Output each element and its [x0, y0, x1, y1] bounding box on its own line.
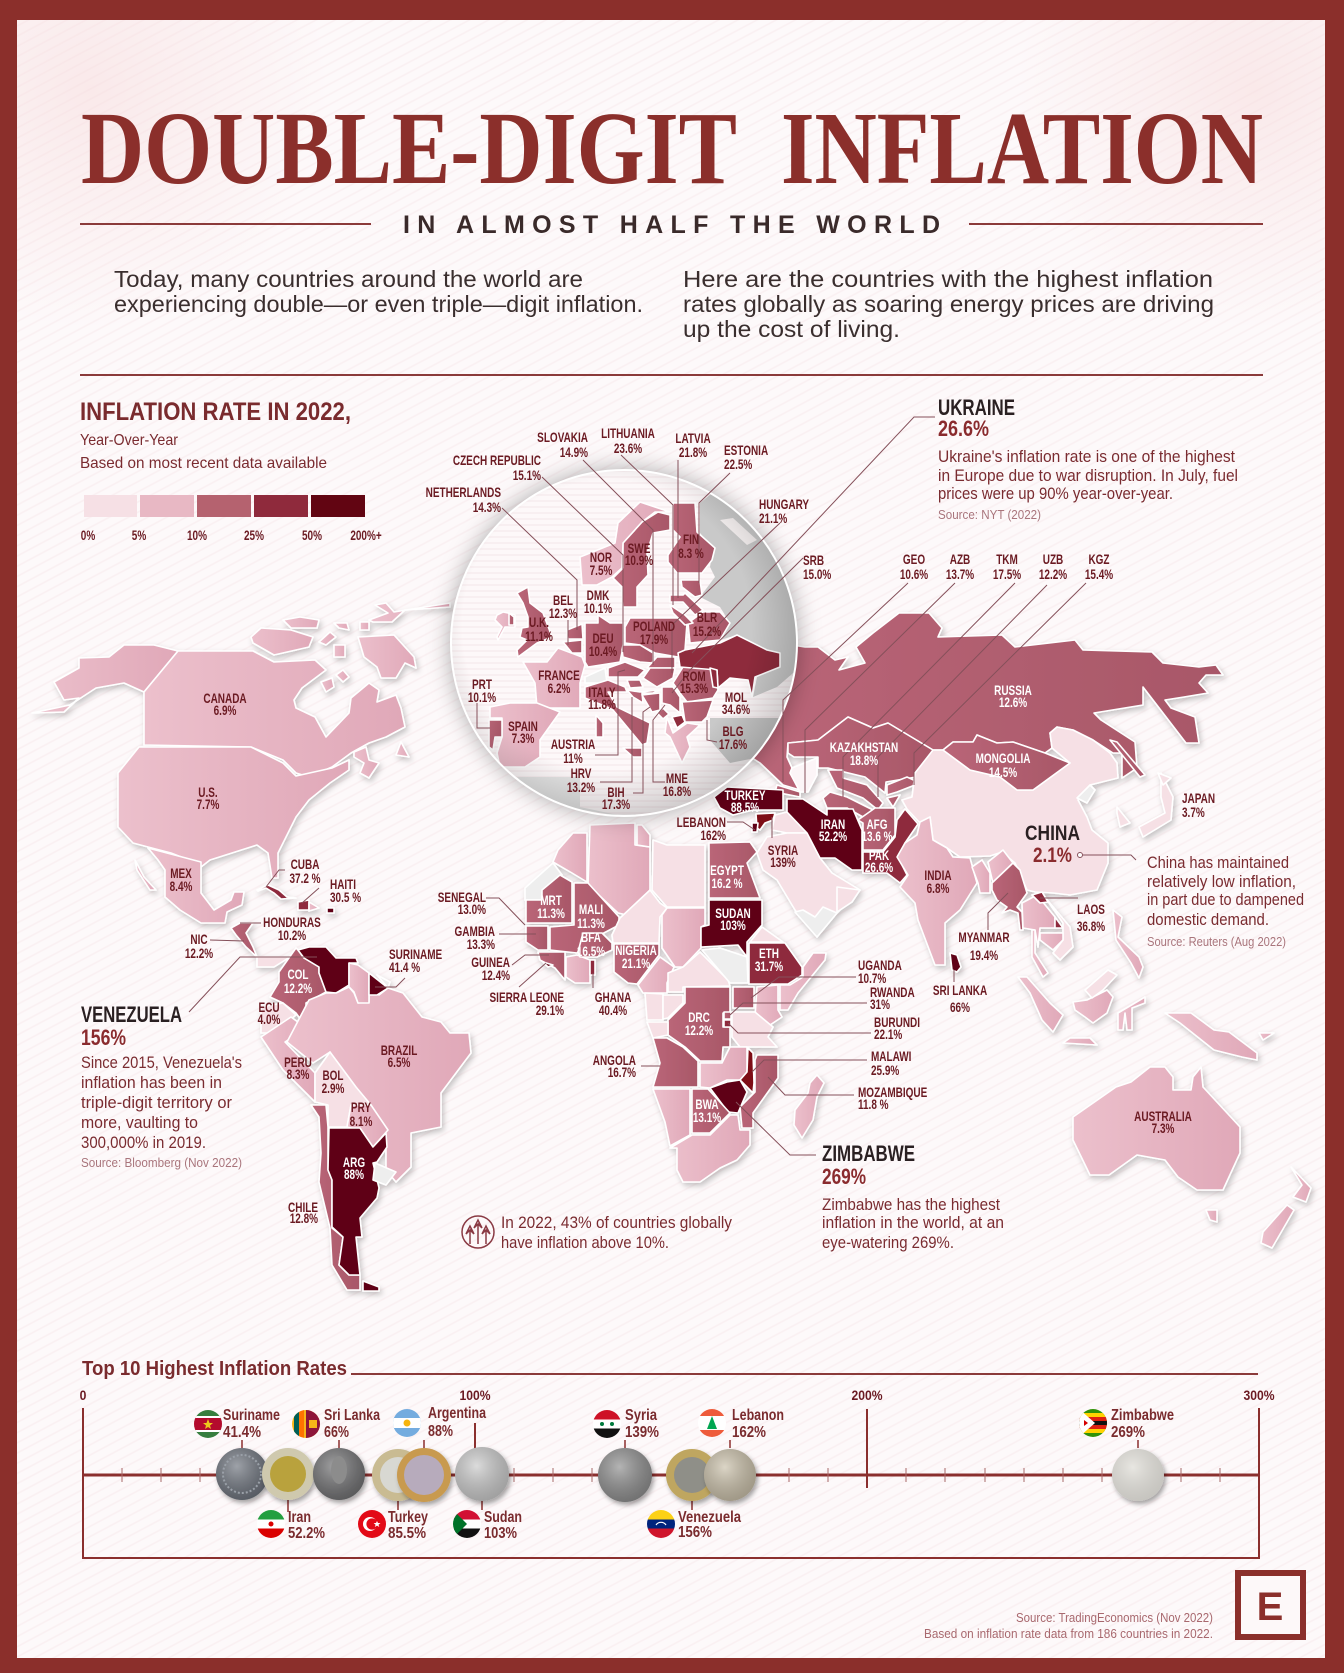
- label: Pakistan: 26.6%: [865, 859, 894, 875]
- label: Bolivia: 2.9%: [322, 1080, 345, 1096]
- label: Finland: FIN: [683, 531, 699, 547]
- label: Burundi: BURUNDI: [874, 1014, 920, 1030]
- timeline label: Venezuela: 156%: [678, 1524, 712, 1541]
- label: Czech Republic: 15.1%: [513, 467, 541, 483]
- callout: Venezuela: 156%: [81, 1025, 126, 1050]
- label: Kazakhstan: KAZAKHSTAN: [830, 739, 898, 755]
- label: Senegal: SENEGAL: [438, 889, 486, 905]
- callout: Ukraine: in Europe due to war disruption. In July, fuel: [938, 466, 1238, 485]
- label: Haiti: 30.5 %: [330, 889, 361, 905]
- label: Bulgaria: BLG: [722, 723, 744, 739]
- legend scale: 50%: [302, 527, 322, 543]
- label: Bosnia: 17.3%: [602, 796, 631, 812]
- label: Egypt: EGYPT: [710, 862, 745, 878]
- flag: Venezuela: [647, 1510, 675, 1538]
- label: Ecuador: 4.0%: [258, 1011, 281, 1027]
- timeline label: Suriname: Suriname: [223, 1407, 280, 1424]
- flag: Iran: [257, 1510, 285, 1538]
- label: Egypt: 16.2 %: [711, 875, 743, 891]
- country: United Kingdom: [517, 587, 552, 657]
- label: Myanmar: 19.4%: [970, 947, 999, 963]
- country: Norway: [580, 502, 670, 585]
- label: Afghanistan: AFG: [866, 816, 888, 832]
- label: Latvia: 21.8%: [679, 444, 708, 460]
- axis tick labels: 200%: [851, 1387, 883, 1403]
- label: Senegal: 13.0%: [458, 901, 486, 917]
- label: Belgium: BEL: [553, 592, 573, 608]
- coin: Zimbabwe: [1112, 1449, 1164, 1501]
- label: Mauritania: 11.3%: [537, 905, 565, 921]
- label: Mauritania: MRT: [540, 892, 562, 908]
- label: Nicaragua: NIC: [190, 931, 208, 947]
- legend heading: Year-Over-Year: [80, 432, 179, 449]
- label: Botswana: BWA: [695, 1096, 719, 1112]
- label: Lithuania: 23.6%: [614, 440, 643, 456]
- label: Lebanon: LEBANON: [677, 814, 726, 830]
- timeline label: Argentina: 88%: [428, 1423, 453, 1440]
- label: Guinea: GUINEA: [471, 954, 510, 970]
- title: DOUBLE-DIGIT: [81, 91, 737, 206]
- coin: Syria: [598, 1448, 652, 1502]
- label: Iran: 52.2%: [819, 828, 848, 844]
- label: Bosnia: BIH: [607, 784, 625, 800]
- intro text right: up the cost of living.: [683, 316, 900, 342]
- label: Ethiopia: ETH: [759, 945, 779, 961]
- label: Turkmenistan: TKM: [996, 551, 1018, 567]
- country: France: [523, 648, 585, 708]
- subtitle: IN ALMOST HALF THE WORLD: [403, 211, 940, 239]
- label: Azerbaijan: AZB: [950, 551, 971, 567]
- label: Syria: SYRIA: [768, 842, 799, 858]
- legend heading: INFLATION RATE IN 2022,: [80, 398, 351, 426]
- country: Italy: [585, 680, 650, 745]
- label: Brazil: BRAZIL: [381, 1042, 417, 1058]
- label: Paraguay: PRY: [351, 1099, 371, 1115]
- label: Azerbaijan: 13.7%: [946, 566, 975, 582]
- timeline label: Iran: Iran: [288, 1509, 311, 1526]
- region: South and Southeast Asia: [897, 773, 1173, 1045]
- label: Kyrgyzstan: KGZ: [1088, 551, 1110, 567]
- region: Russia and Central Asia: [740, 613, 1223, 817]
- label: Spain: 7.3%: [512, 730, 535, 746]
- label: Guinea: 12.4%: [482, 967, 510, 983]
- flag: Lebanon: [698, 1409, 726, 1437]
- label: Sierra Leone: 29.1%: [536, 1002, 564, 1018]
- label: Lithuania: LITHUANIA: [601, 425, 655, 441]
- label: Germany: 10.4%: [589, 643, 618, 659]
- label: Mali: MALI: [579, 901, 603, 917]
- label: Mongolia: MONGOLIA: [976, 750, 1031, 766]
- label: Montenegro: MNE: [666, 770, 688, 786]
- label: Colombia: 12.2%: [284, 980, 313, 996]
- region: North America: [32, 603, 450, 957]
- region: Middle East: [714, 787, 918, 937]
- label: Denmark: DMK: [587, 587, 610, 603]
- label: Ethiopia: 31.7%: [755, 958, 784, 974]
- label: Netherlands: 14.3%: [473, 499, 501, 515]
- label: Serbia: SRB: [803, 552, 824, 568]
- label: Estonia: 22.5%: [724, 456, 753, 472]
- label: Kazakhstan: 18.8%: [850, 752, 879, 768]
- label: Estonia: ESTONIA: [724, 442, 769, 458]
- callout: Zimbabwe: [822, 1141, 1004, 1252]
- label: Brazil: 6.5%: [388, 1054, 411, 1070]
- timeline label: Suriname: 41.4%: [223, 1424, 261, 1441]
- label: United States: U.S.: [198, 784, 218, 800]
- label: Uzbekistan: 12.2%: [1039, 566, 1068, 582]
- intro text left: experiencing double—or even triple—digit inflation.: [114, 291, 643, 317]
- legend scale: 200%+: [350, 527, 382, 543]
- source note: Based on inflation rate data from 186 countries in 2022.: [924, 1626, 1213, 1641]
- label: UK: 11.1%: [525, 628, 553, 644]
- timeline label: Turkey: 85.5%: [388, 1525, 426, 1542]
- label: Suriname: 41.4 %: [389, 959, 420, 975]
- label: Argentina: 88%: [344, 1166, 364, 1182]
- label: Mozambique: MOZAMBIQUE: [858, 1084, 927, 1100]
- label: Russia: 12.6%: [999, 694, 1028, 710]
- label: Mali: 11.3%: [577, 915, 605, 931]
- callout: China: [1025, 822, 1304, 949]
- legend scale: 10%: [187, 527, 207, 543]
- timeline label: Lebanon: 162%: [732, 1424, 766, 1441]
- label: Gambia: GAMBIA: [455, 923, 495, 939]
- label: Nicaragua: 12.2%: [185, 945, 214, 961]
- label: Mexico: MEX: [170, 865, 192, 881]
- callout: Venezuela: VENEZUELA: [81, 1002, 182, 1027]
- legend scale: 25%: [244, 527, 264, 543]
- axis tick labels: 300%: [1243, 1387, 1275, 1403]
- label: Slovakia: 14.9%: [560, 444, 588, 460]
- callout: China: Source: Reuters (Aug 2022): [1147, 934, 1286, 949]
- label: France: FRANCE: [538, 667, 580, 683]
- label: Turkey: TURKEY: [724, 787, 766, 803]
- callout: Venezuela: Since 2015, Venezuela's: [81, 1053, 242, 1072]
- label: Sweden: SWE: [628, 540, 650, 556]
- label: Finland: 8.3 %: [678, 545, 704, 561]
- label: Hungary: HUNGARY: [759, 496, 809, 512]
- label: Malawi: MALAWI: [871, 1048, 911, 1064]
- coin: Venezuela: [666, 1449, 718, 1501]
- timeline label: Sri Lanka: 66%: [324, 1424, 349, 1441]
- title: [81, 91, 1263, 206]
- label: Turkey: 88.5%: [731, 799, 760, 815]
- label: Afghanistan: 13.6 %: [861, 828, 893, 844]
- label: Spain: SPAIN: [508, 718, 538, 734]
- label: Nigeria: NIGERIA: [615, 942, 657, 958]
- callout: Zimbabwe: Zimbabwe has the highest: [822, 1195, 1000, 1214]
- axis tick labels: 0: [80, 1387, 86, 1403]
- label: Croatia: HRV: [571, 765, 592, 781]
- label: Georgia: 10.6%: [900, 566, 929, 582]
- axis tick labels: 100%: [459, 1387, 491, 1403]
- coin: Sudan: [455, 1447, 509, 1501]
- timeline label: Argentina: Argentina: [428, 1405, 486, 1422]
- label: Sudan: 103%: [720, 917, 746, 933]
- label: United States: 7.7%: [197, 796, 220, 812]
- region: South America: [257, 947, 471, 1291]
- label: Austria: 11%: [563, 750, 583, 766]
- label: Moldova: MOL: [725, 689, 747, 705]
- label: Myanmar: MYANMAR: [958, 929, 1010, 945]
- axis tick labels: [80, 1387, 1275, 1403]
- coin: Lebanon: [704, 1449, 756, 1501]
- callout: Zimbabwe: inflation in the world, at an: [822, 1213, 1004, 1232]
- map: world land: [32, 603, 1311, 1291]
- timeline label: Syria: 139%: [625, 1424, 659, 1441]
- label: Croatia: 13.2%: [567, 779, 596, 795]
- label: Romania: 15.3%: [680, 680, 709, 696]
- label: Mozambique: 11.8 %: [858, 1096, 889, 1112]
- label: Sri Lanka: SRI LANKA: [933, 982, 988, 998]
- legend scale: 5%: [132, 527, 147, 543]
- callout: Venezuela: 300,000% in 2019.: [81, 1133, 206, 1152]
- label: Japan: JAPAN: [1182, 790, 1215, 806]
- country: Germany: [585, 615, 623, 667]
- label: France: 6.2%: [548, 680, 571, 696]
- source note: Source: TradingEconomics (Nov 2022): [1016, 1610, 1213, 1625]
- label: Rwanda: RWANDA: [870, 984, 915, 1000]
- intro text right: Here are the countries with the highest inflation: [683, 266, 1213, 292]
- label: Burkina Faso: BFA: [581, 929, 601, 945]
- label: Ghana: 40.4%: [599, 1002, 628, 1018]
- timeline axis: [83, 1408, 1259, 1558]
- label: Honduras: 10.2%: [278, 927, 307, 943]
- source note: [924, 1610, 1213, 1641]
- label: Czech Republic: CZECH REPUBLIC: [453, 452, 541, 468]
- callout: Ukraine: prices were up 90% year-over-year.: [938, 484, 1173, 503]
- label: Cuba: 37.2 %: [289, 870, 321, 886]
- country: Romania: [673, 667, 718, 702]
- callout: Venezuela: inflation has been in: [81, 1073, 222, 1092]
- callout: Zimbabwe: eye-watering 269%.: [822, 1233, 954, 1252]
- label: Romania: ROM: [682, 668, 706, 684]
- label: Colombia: COL: [287, 966, 309, 982]
- label: Burkina Faso: 16.5%: [577, 943, 606, 959]
- callout: Ukraine: Source: NYT (2022): [938, 507, 1041, 522]
- label: Uganda: 10.7%: [858, 970, 887, 986]
- region: Oceania: [1073, 1013, 1311, 1248]
- label: Paraguay: 8.1%: [350, 1113, 373, 1129]
- callout: Venezuela: [81, 1002, 242, 1170]
- intro text left: Today, many countries around the world are: [114, 266, 583, 292]
- coin: Turkey: [372, 1449, 424, 1501]
- label: India: 6.8%: [927, 880, 950, 896]
- label: Malawi: 25.9%: [871, 1062, 900, 1078]
- magnifier: Europe inset: [450, 470, 800, 820]
- callout: Ukraine: 26.6%: [938, 416, 989, 441]
- label: Haiti: HAITI: [330, 876, 356, 892]
- country: Finland: [668, 503, 715, 573]
- region: Africa: [525, 823, 826, 1182]
- callout: Zimbabwe: 269%: [822, 1164, 866, 1189]
- timeline label: Sudan: 103%: [484, 1525, 517, 1542]
- label: Russia: RUSSIA: [994, 682, 1032, 698]
- label: Italy: 11.8%: [588, 696, 616, 712]
- label: Poland: POLAND: [633, 618, 675, 634]
- logo: [1238, 1573, 1303, 1637]
- label: Australia: AUSTRALIA: [1134, 1108, 1192, 1124]
- flag: Sudan: [453, 1510, 481, 1538]
- timeline label: Turkey: Turkey: [388, 1509, 428, 1526]
- legend scale: [81, 495, 382, 543]
- coin: Iran: [262, 1448, 314, 1500]
- timeline label: Sri Lanka: Sri Lanka: [324, 1407, 380, 1424]
- logo: E: [1257, 1585, 1283, 1629]
- label: Moldova: 34.6%: [722, 701, 751, 717]
- label: Bulgaria: 17.6%: [719, 736, 748, 752]
- label: Canada: CANADA: [203, 690, 247, 706]
- label: Laos: LAOS: [1077, 901, 1105, 917]
- label: Portugal: PRT: [472, 676, 493, 692]
- label: India: INDIA: [924, 867, 952, 883]
- callout: China: in part due to dampened: [1147, 890, 1304, 909]
- timeline label: Syria: Syria: [625, 1407, 657, 1424]
- label: Pakistan: PAK: [869, 847, 890, 863]
- timeline heading: Top 10 Highest Inflation Rates: [82, 1358, 347, 1380]
- label: Netherlands: NETHERLANDS: [426, 484, 501, 500]
- label: Ghana: GHANA: [595, 989, 632, 1005]
- callout: China: China has maintained: [1147, 853, 1289, 872]
- label: Gambia: 13.3%: [467, 936, 495, 952]
- label: Iran: IRAN: [821, 816, 845, 832]
- callout: China: 2.1%: [1033, 844, 1072, 867]
- callout: Venezuela: Source: Bloomberg (Nov 2022): [81, 1155, 242, 1170]
- timeline label: Lebanon: Lebanon: [732, 1407, 784, 1424]
- label: Georgia: GEO: [903, 551, 925, 567]
- country: Ukraine: [678, 635, 780, 697]
- label: Rwanda: 31%: [870, 996, 890, 1012]
- timeline label: Zimbabwe: 269%: [1111, 1424, 1145, 1441]
- label: Angola: 16.7%: [608, 1064, 636, 1080]
- label: Norway: 7.5%: [590, 562, 613, 578]
- label: Angola: ANGOLA: [593, 1052, 636, 1068]
- label: Chile: 12.8%: [290, 1210, 318, 1226]
- region: China and Mongolia: [902, 727, 1118, 895]
- label: Portugal: 10.1%: [468, 689, 497, 705]
- callout: 43 percent of countries: In 2022, 43% of countries globally: [501, 1213, 732, 1232]
- coins: [216, 1447, 1164, 1502]
- label: Italy: ITALY: [588, 684, 616, 700]
- label: Denmark: 10.1%: [584, 600, 613, 616]
- label: Serbia: 15.0%: [803, 566, 832, 582]
- label: Sweden: 10.9%: [625, 552, 654, 568]
- coin: Suriname: [216, 1448, 268, 1500]
- flag: Sri Lanka: [292, 1410, 320, 1438]
- label: Peru: 8.3%: [287, 1066, 310, 1082]
- label: Belgium: 12.3%: [549, 605, 578, 621]
- callout: China: domestic demand.: [1147, 910, 1269, 929]
- callout: 43 percent of countries: have inflation above 10%.: [501, 1233, 669, 1252]
- label: Austria: AUSTRIA: [551, 736, 596, 752]
- label: Chile: CHILE: [288, 1199, 318, 1215]
- callout: China: relatively low inflation,: [1147, 872, 1296, 891]
- callout: 43 percent of countries: [501, 1213, 732, 1252]
- legend scale: 0%: [81, 527, 96, 543]
- coin: Sri Lanka: [313, 1448, 365, 1500]
- label: Ecuador: ECU: [258, 999, 280, 1015]
- timeline label: Sudan: Sudan: [484, 1509, 522, 1526]
- timeline label: Iran: 52.2%: [288, 1525, 325, 1542]
- callout: Venezuela: more, vaulting to: [81, 1113, 198, 1132]
- label: Germany: DEU: [592, 630, 614, 646]
- label: Mexico: 8.4%: [170, 878, 193, 894]
- label: DRC: 12.2%: [685, 1022, 714, 1038]
- label: Sierra Leone: SIERRA LEONE: [490, 989, 564, 1005]
- flag: Turkey: [358, 1510, 386, 1538]
- label: Belarus: BLR: [697, 609, 718, 625]
- label: Belarus: 15.2%: [693, 623, 722, 639]
- country: Poland: [625, 618, 687, 657]
- legend heading: [80, 398, 351, 472]
- timeline label: Zimbabwe: Zimbabwe: [1111, 1407, 1174, 1424]
- label: Burundi: 22.1%: [874, 1026, 903, 1042]
- label: Norway: NOR: [590, 549, 612, 565]
- country: Spain: [490, 703, 560, 767]
- label: Bolivia: BOL: [322, 1067, 344, 1083]
- label: Montenegro: 16.8%: [663, 783, 692, 799]
- timeline label: Venezuela: Venezuela: [678, 1509, 741, 1526]
- label: Poland: 17.9%: [640, 631, 669, 647]
- label: Hungary: 21.1%: [759, 510, 788, 526]
- label: Nigeria: 21.1%: [622, 955, 651, 971]
- callout: Ukraine: Ukraine's inflation rate is one of the highest: [938, 447, 1235, 466]
- label: Suriname: SURINAME: [389, 946, 442, 962]
- label: Peru: PERU: [284, 1054, 312, 1070]
- label: UK: U.K.: [529, 614, 549, 630]
- flag: Argentina: [393, 1409, 421, 1437]
- label: Laos: 36.8%: [1077, 918, 1106, 934]
- label: Sudan: SUDAN: [715, 905, 751, 921]
- label: Lebanon: 162%: [700, 827, 726, 843]
- label: Turkmenistan: 17.5%: [993, 566, 1022, 582]
- label: Canada: 6.9%: [214, 702, 237, 718]
- label: Botswana: 13.1%: [693, 1109, 722, 1125]
- flag: Zimbabwe: [1079, 1409, 1107, 1437]
- leader lines: [189, 417, 1136, 1155]
- label: Uzbekistan: UZB: [1043, 551, 1064, 567]
- coin: Argentina: [397, 1448, 451, 1502]
- label: Syria: 139%: [770, 854, 796, 870]
- label: Latvia: LATVIA: [675, 430, 711, 446]
- flag: Syria: [593, 1410, 621, 1438]
- label: Kyrgyzstan: 15.4%: [1085, 566, 1114, 582]
- intro text right: rates globally as soaring energy prices are driving: [683, 291, 1214, 317]
- label: Australia: 7.3%: [1152, 1120, 1175, 1136]
- label: Cuba: CUBA: [291, 856, 320, 872]
- flag: Suriname: [194, 1410, 222, 1438]
- label: Mongolia: 14.5%: [989, 764, 1018, 780]
- icon: rising arrows: [462, 1216, 494, 1248]
- legend heading: Based on most recent data available: [80, 455, 327, 472]
- callout: Zimbabwe: ZIMBABWE: [822, 1141, 915, 1166]
- label: Sri Lanka: 66%: [950, 999, 970, 1015]
- country: Sweden: [613, 512, 670, 607]
- callout: Ukraine: [938, 395, 1238, 522]
- label: Argentina: ARG: [343, 1154, 365, 1170]
- label: Uganda: UGANDA: [858, 957, 902, 973]
- label: Slovakia: SLOVAKIA: [537, 429, 588, 445]
- callout: China: CHINA: [1025, 822, 1080, 845]
- label: Japan: 3.7%: [1182, 804, 1205, 820]
- callout: Ukraine: UKRAINE: [938, 395, 1015, 420]
- label: Honduras: HONDURAS: [263, 914, 321, 930]
- callout: Venezuela: triple-digit territory or: [81, 1093, 232, 1112]
- label: DRC: DRC: [688, 1009, 710, 1025]
